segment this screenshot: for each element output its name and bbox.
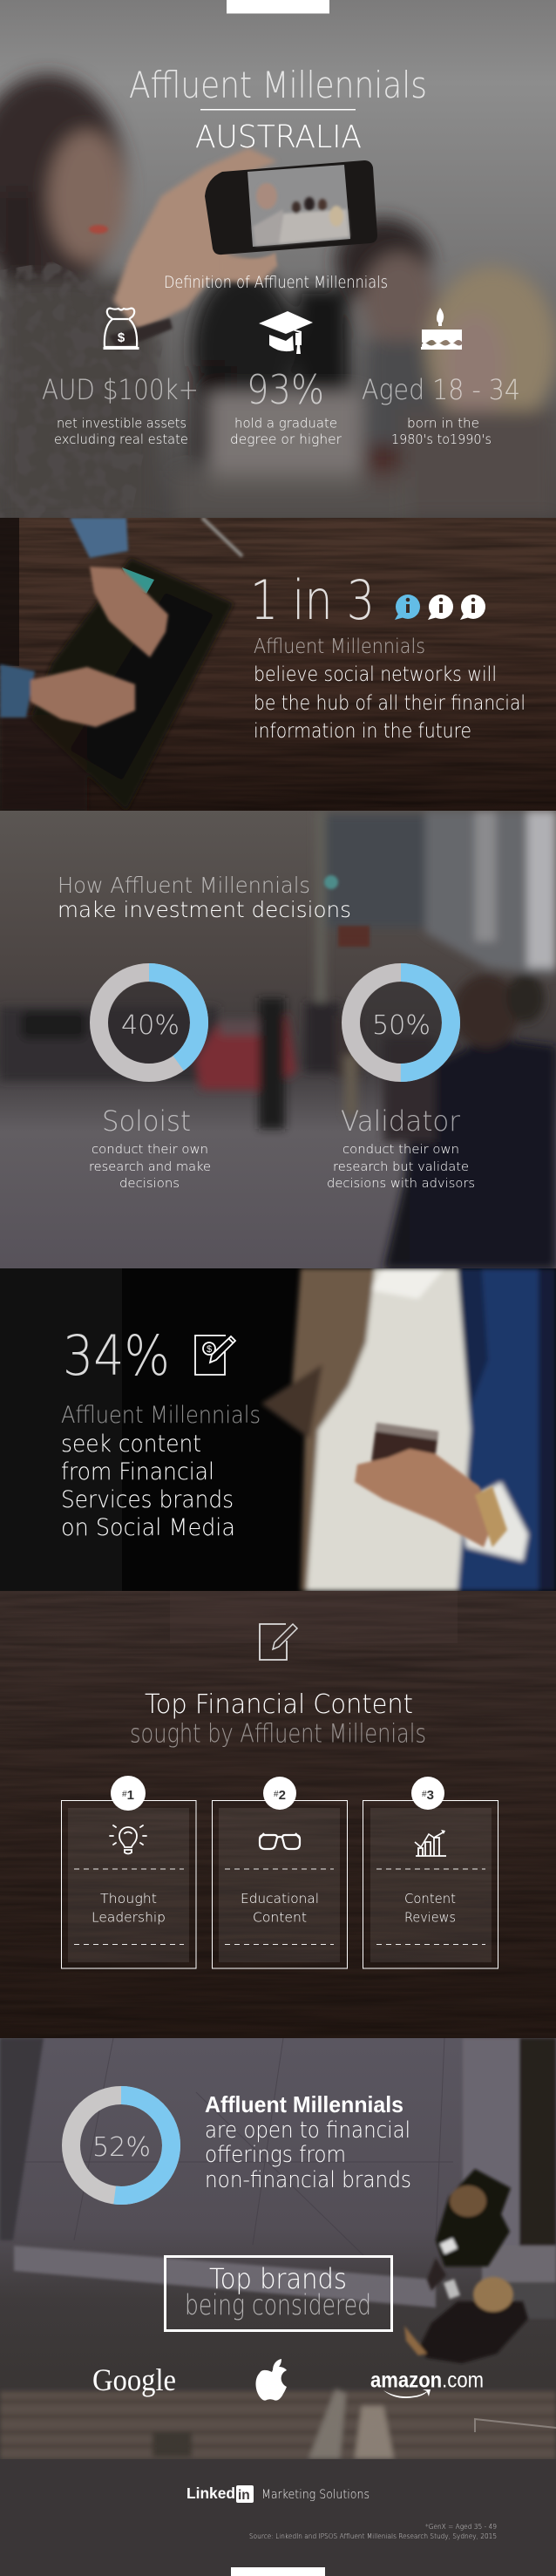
label: Thought [100, 1891, 157, 1907]
text: seek content: Services brands [61, 1486, 234, 1513]
label: Educational [241, 1891, 319, 1907]
donut chart: 40% Soloist: 40% [121, 1010, 180, 1041]
card: content reviews [363, 1777, 498, 1968]
badge: #1: # [122, 1790, 127, 1799]
text: seek content: Affluent Millennials [61, 1402, 261, 1429]
icon: money bag [103, 309, 139, 350]
stat: AUD $100k+ [42, 373, 199, 447]
badge: #2 [263, 1777, 296, 1810]
text: 1 in 3 description: believe social networks will [254, 663, 497, 686]
footnote and source: Source: LinkedIn and IPSOS Affluent Millenials Research Study, Sydney, 2015 [249, 2532, 497, 2540]
heading: definition: Definition of Affluent Millennials [164, 273, 388, 292]
label: Soloist: Soloist [102, 1104, 191, 1138]
text: seek content [61, 1402, 261, 1541]
stat: 93%: degree or higher [230, 432, 342, 447]
logo: LinkedIn Marketing Solutions: Marketing Solutions [261, 2488, 370, 2502]
logo: LinkedIn Marketing Solutions: Linked [186, 2484, 235, 2502]
text: seek content: from Financial [61, 1458, 214, 1485]
phone in hand [205, 160, 377, 275]
icon: rising chart [415, 1830, 446, 1856]
background people [0, 74, 556, 523]
stat: AUD $100k+: AUD $100k+ [42, 373, 199, 406]
dashed divider [376, 1869, 485, 1944]
title: Australia: AUSTRALIA [195, 119, 362, 155]
panel: non-financial brands [0, 2038, 556, 2459]
logo: Google: Google [92, 2362, 176, 2397]
icon: graduation cap [259, 311, 313, 354]
card: educational content [213, 1777, 347, 1968]
donut chart: 40% Soloist [99, 973, 199, 1072]
donut chart: 50% Validator [350, 973, 451, 1072]
label: Soloist: conduct their own [92, 1143, 208, 1157]
label: Soloist: research and make [89, 1160, 211, 1174]
label: Leadership [92, 1909, 166, 1925]
two people from above [404, 2169, 528, 2363]
stat: Aged 18-34: 1980's to1990's [391, 432, 492, 447]
white top tab [227, 0, 329, 14]
icon: note and pencil [260, 1624, 297, 1660]
panel: top financial content [0, 1591, 556, 2038]
stairs [0, 2389, 556, 2459]
hands and sleeves [0, 518, 168, 727]
crowd [397, 1037, 556, 1269]
pavement and kerb [0, 2038, 556, 2319]
icon: dollar note and pencil: $ [207, 1344, 212, 1355]
label: Validator: Validator [341, 1104, 461, 1138]
stat: AUD $100k+: net investible assets [57, 415, 186, 431]
text: open to non-financial brands: are open to financial [205, 2117, 410, 2144]
heading: how they decide [58, 873, 351, 922]
label: Content [253, 1909, 307, 1925]
badge: #1 [111, 1776, 146, 1811]
icon: dollar note and pencil [195, 1336, 235, 1375]
label: Validator: decisions with advisors [327, 1177, 475, 1191]
text: seek content: seek content [61, 1431, 201, 1458]
badge: #1: 1 [127, 1788, 134, 1803]
eyeglasses [202, 518, 242, 556]
text: 1 in 3 description [254, 636, 525, 743]
label: Validator: research but validate [333, 1160, 469, 1174]
stat: Aged 18-34: born in the [407, 415, 479, 431]
label [241, 1891, 319, 1925]
stat: Aged 18-34: Aged 18 - 34 [362, 373, 520, 406]
heading: how they decide: How Affluent Millennials [58, 873, 310, 898]
badge: #2: 2 [279, 1788, 286, 1803]
badge: #3: 3 [427, 1788, 434, 1803]
title rule [200, 109, 356, 110]
phone and hand [355, 1423, 507, 1547]
label: Validator: conduct their own [342, 1143, 459, 1157]
heading: top financial content: sought by Affluent Millenials [130, 1719, 426, 1749]
heading: how they decide: make investment decisions [58, 897, 351, 922]
icon: light bulb [110, 1825, 146, 1853]
footnote and source: *GenX = Aged 35 - 49 [425, 2523, 497, 2531]
building and street [326, 814, 425, 928]
label: Content [404, 1891, 456, 1907]
icon: money bag: $ [118, 330, 125, 345]
stat: 93%: hold a graduate [234, 415, 337, 431]
dashed divider [74, 1869, 184, 1944]
label: Validator [327, 1104, 475, 1191]
stat: 1 in 3: 1 in 3 [250, 568, 375, 632]
donut chart: 52% [71, 2096, 171, 2195]
people [259, 998, 285, 1129]
logo: Apple [256, 2359, 287, 2401]
label: Soloist: decisions [119, 1177, 180, 1191]
text: open to non-financial brands [205, 2091, 411, 2193]
donut chart: 52%: 52% [92, 2132, 151, 2163]
logo: amazon.com: amazon.com [370, 2368, 484, 2392]
text: seek content: on Social Media [61, 1514, 235, 1541]
heading: top financial content [130, 1689, 426, 1749]
text: open to non-financial brands: non-financial brands [205, 2167, 411, 2193]
stat: 93% [230, 366, 342, 447]
stat: 93%: 93% [247, 366, 324, 413]
label [404, 1891, 456, 1925]
label [92, 1891, 166, 1925]
logo: LinkedIn Marketing Solutions: in [238, 2488, 250, 2503]
dress pattern [0, 262, 162, 355]
cars [21, 1011, 86, 1039]
donut chart: 50% Validator: 50% [372, 1010, 431, 1041]
badge: #2: # [274, 1790, 279, 1799]
label: Soloist [89, 1104, 211, 1191]
badge: #3: # [422, 1790, 427, 1799]
arm and hand [113, 148, 277, 331]
callout: top brands: Top brands [209, 2262, 347, 2295]
icon: glasses [260, 1833, 300, 1849]
card: thought leadership [61, 1776, 196, 1968]
stat: 34%: 34% [63, 1324, 170, 1388]
laptop keyboard [0, 558, 234, 811]
white bottom tab [231, 2567, 325, 2576]
callout: top brands: being considered [185, 2288, 371, 2321]
stat: AUD $100k+: excluding real estate [54, 432, 188, 447]
panel: 1 in 3 social networks [0, 518, 556, 811]
badge: #3 [411, 1777, 444, 1810]
dashed divider [225, 1869, 334, 1944]
icon: info bubbles [395, 595, 485, 620]
text: 1 in 3 description: Affluent Millennials [254, 636, 425, 658]
logo: LinkedIn Marketing Solutions [186, 2484, 370, 2503]
panel: investment decisions [0, 811, 556, 1269]
title: Affluent Millennials: Affluent Millennials [129, 64, 427, 106]
callout: top brands [166, 2256, 392, 2331]
text: open to non-financial brands: offerings from [205, 2142, 346, 2168]
panel: footer [0, 2459, 556, 2576]
label: Reviews [404, 1909, 456, 1925]
panel: 34% seek content [0, 1268, 556, 1591]
heading: top financial content: Top Financial Content [145, 1689, 413, 1720]
text: 1 in 3 description: information in the future [254, 720, 471, 743]
text: open to non-financial brands: Affluent Millennials [205, 2091, 403, 2117]
text: 1 in 3 description: be the hub of all their financial [254, 692, 525, 715]
footnote and source [249, 2523, 497, 2540]
icon: birthday cake [421, 308, 462, 350]
panel: hero selfie section [0, 0, 556, 523]
stat: Aged 18-34 [362, 373, 520, 447]
